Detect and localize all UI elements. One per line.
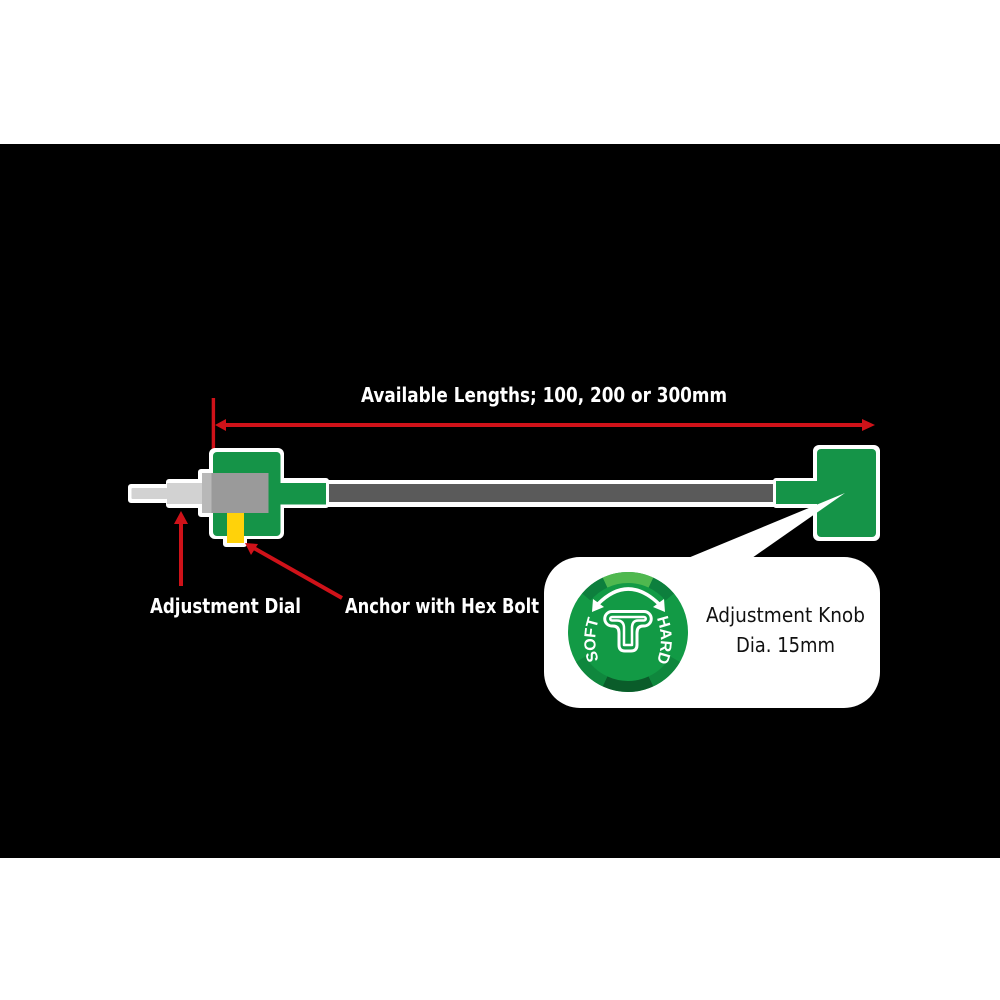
arrow: adjustment dial xyxy=(174,511,188,586)
arrow: anchor xyxy=(245,543,342,598)
hex bolt xyxy=(227,513,244,543)
dimension arrow xyxy=(212,398,875,452)
callout bubble: Dia. 15mm xyxy=(736,633,835,657)
adjustment tip xyxy=(132,488,168,499)
icon: adjustment knob xyxy=(568,572,688,692)
white outline of adjuster xyxy=(128,448,329,547)
adjuster assembly xyxy=(128,448,329,547)
label: soft: SOFT xyxy=(584,616,598,662)
green stem xyxy=(280,483,326,504)
callout bubble xyxy=(544,493,880,708)
dial collar xyxy=(202,473,212,513)
icon: double arrow xyxy=(592,589,665,612)
callout text: Adjustment Knob xyxy=(706,603,865,627)
label: hard: HARD xyxy=(657,616,672,664)
cable rod xyxy=(326,480,776,507)
dimension label: Available Lengths; 100, 200 or 300mm xyxy=(361,383,727,407)
adjustment dial xyxy=(167,483,202,504)
adjustment knob housing xyxy=(773,445,880,541)
dial barrel xyxy=(212,473,268,513)
green anchor body xyxy=(213,452,280,536)
label: anchor with hex bolt: Anchor with Hex Bolt xyxy=(345,594,539,618)
label: adjustment dial: Adjustment Dial xyxy=(150,594,301,618)
black background panel xyxy=(0,144,1000,858)
icon: T logo xyxy=(605,612,651,651)
